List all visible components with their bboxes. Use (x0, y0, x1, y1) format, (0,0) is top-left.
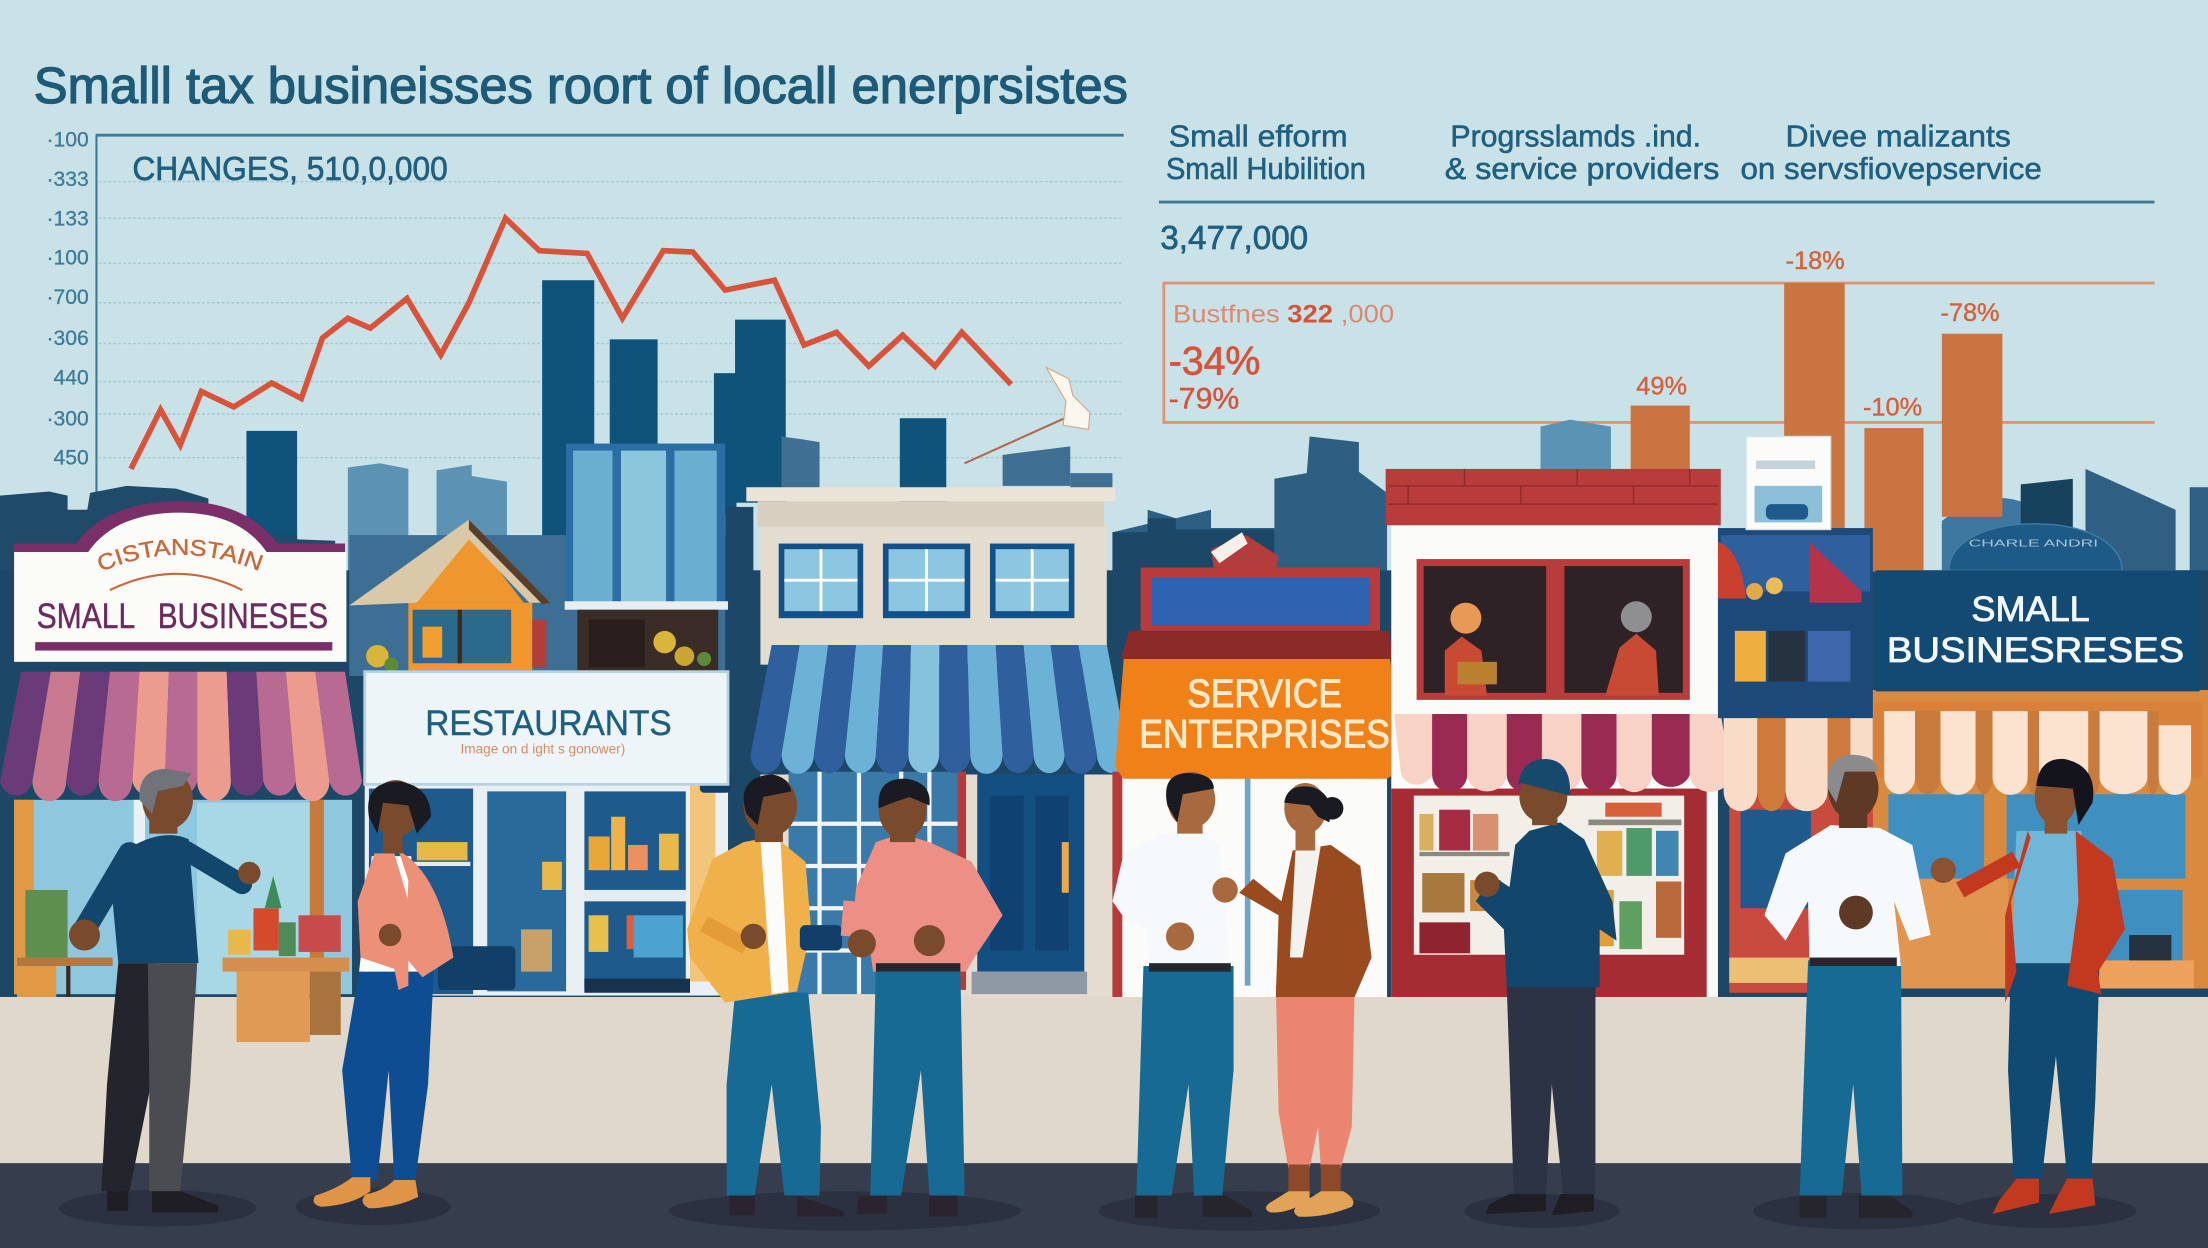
restaurants sign: Image on d ight s gonower) (460, 740, 625, 756)
y axis labels: 440 (53, 366, 89, 389)
bar value labels: -18% (1786, 247, 1845, 275)
navy sign: CHARLE ANDRI (1969, 538, 2098, 549)
sign: small businesses: CISTANSTAIN (98, 539, 264, 571)
y axis labels: ·333 (46, 168, 89, 191)
business label: Bustfnes 322 ,000 (1173, 300, 1394, 328)
shop: service enterprises (1112, 532, 1407, 1000)
title: Smalll tax busineisses roort of locall enerprsistes (34, 57, 1128, 114)
orange cream awning (1724, 718, 1873, 811)
right column headers: & service providers (1445, 151, 1719, 186)
person: man in pink shirt (848, 779, 1003, 1217)
bar value labels: 49% (1636, 372, 1687, 400)
brown annex (565, 601, 728, 672)
city skyline (0, 280, 2208, 1000)
road (0, 1163, 2208, 1248)
market stall (222, 876, 349, 972)
person: woman in coral jacket (314, 780, 453, 1208)
shop: restaurants (365, 672, 731, 996)
bar value labels: -10% (1863, 393, 1922, 421)
y axis labels: ·133 (46, 207, 89, 230)
right column headers: Progrsslamds .ind. (1450, 118, 1701, 153)
shop: red brick (1386, 469, 1731, 1000)
orange banner (1115, 659, 1407, 779)
right column headers: on servsfiovepservice (1740, 151, 2042, 186)
y axis labels: ·700 (46, 286, 89, 309)
blue awning (751, 645, 1128, 774)
sidewalk (0, 997, 2208, 1163)
y axis labels: ·100 (46, 128, 89, 151)
percent -34: -34% (1169, 340, 1260, 384)
y axis labels: ·100 (46, 247, 89, 270)
restaurants sign (365, 672, 728, 784)
right column headers: Small Hubilition (1166, 151, 1366, 186)
right column headers: Small efform (1169, 118, 1348, 153)
shop: navy middle (1718, 528, 1876, 993)
poster (1746, 437, 1831, 529)
person: woman in red jacket (1931, 759, 2125, 1214)
orange bar chart (1631, 247, 2002, 572)
bar value labels: -78% (1940, 299, 2000, 327)
stat panel: business (1164, 283, 2154, 422)
glass tower (566, 444, 725, 606)
shop: blue awning building (746, 487, 1128, 997)
purple awning (0, 672, 362, 801)
person: man in navy sweater (69, 769, 261, 1212)
icon: flag annotation (965, 368, 1090, 463)
navy sign (1876, 524, 2200, 691)
percent -79: -79% (1169, 382, 1239, 415)
shop: small businesses purple (0, 501, 362, 997)
bar value labels (1636, 247, 2000, 421)
shelf products (417, 817, 683, 972)
right column headers: Divee malizants (1786, 118, 2011, 153)
upper window with workers (1417, 559, 1690, 700)
sign: small businesses (14, 501, 346, 662)
y axis labels (46, 128, 89, 470)
right column headers (1166, 118, 2042, 186)
orange banner: SERVICE (1187, 672, 1342, 716)
chart heading: CHANGES, 510,0,000 (132, 150, 448, 188)
navy sign: BUSINESRESES (1887, 631, 2184, 670)
market stall crates (237, 972, 341, 1042)
restaurants sign: RESTAURANTS (425, 704, 672, 743)
person: man in white shirt right (1764, 755, 1931, 1218)
orange striped awning (1874, 703, 2202, 795)
upper windows (779, 544, 1074, 618)
maroon striped awning (1394, 714, 1731, 792)
y axis labels: 450 (53, 447, 89, 470)
person: woman in brown jacket (1212, 783, 1372, 1217)
orange banner: ENTERPRISES (1139, 713, 1390, 757)
person: man in navy cap from behind (1474, 759, 1617, 1215)
y axis labels: ·306 (46, 327, 89, 350)
sign: small businesses: BUSINESES (158, 597, 328, 636)
y axis labels: ·300 (46, 407, 89, 430)
cottage (349, 520, 551, 672)
navy sign: SMALL (1971, 590, 2090, 629)
blue display box (438, 946, 515, 990)
person: man in white shirt left (1112, 772, 1252, 1218)
person: man in yellow jacket (687, 774, 843, 1217)
sign: small businesses: SMALL (37, 597, 135, 636)
total figure: 3,477,000 (1160, 219, 1308, 257)
store shelves (1419, 803, 1681, 953)
shop: right navy sign (1873, 524, 2208, 997)
red trend line (131, 218, 1011, 469)
line chart panel (46, 128, 1124, 493)
